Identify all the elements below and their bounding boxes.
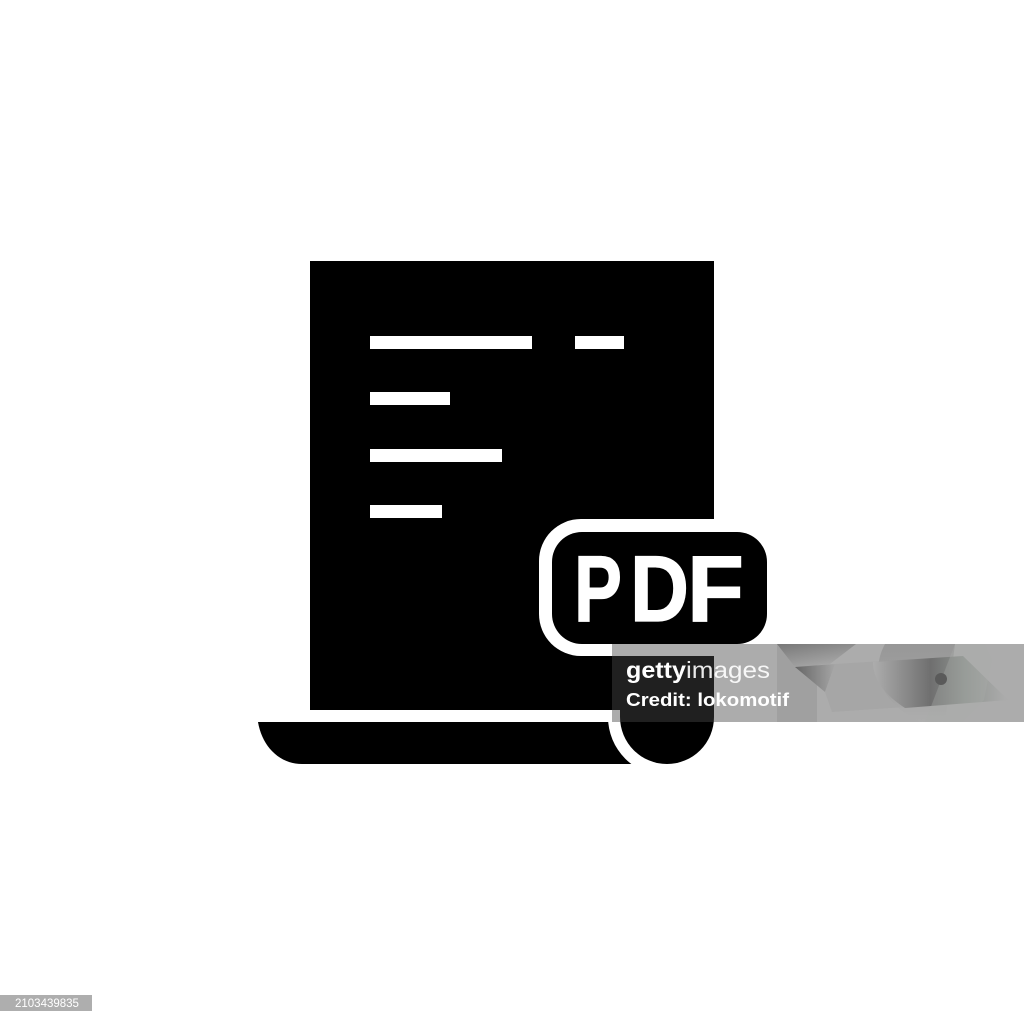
image id tag: 2103439835 xyxy=(15,998,79,1010)
text lines on document xyxy=(370,336,624,518)
bottom scroll band xyxy=(258,722,640,764)
watermark band xyxy=(612,644,1024,722)
watermark logo text: images xyxy=(686,657,770,683)
PDF badge: F xyxy=(687,536,744,641)
PDF badge xyxy=(539,500,784,656)
image id tag xyxy=(0,995,92,1011)
watermark logo text: getty xyxy=(626,657,686,683)
PDF badge: D xyxy=(630,536,689,641)
watermark logo text xyxy=(626,657,770,683)
scroll curl xyxy=(608,710,714,764)
document sheet xyxy=(310,261,714,710)
icon: PDF document xyxy=(258,261,784,776)
PDF badge: P xyxy=(574,536,622,641)
watermark credit text: Credit: lokomotif xyxy=(626,690,790,710)
